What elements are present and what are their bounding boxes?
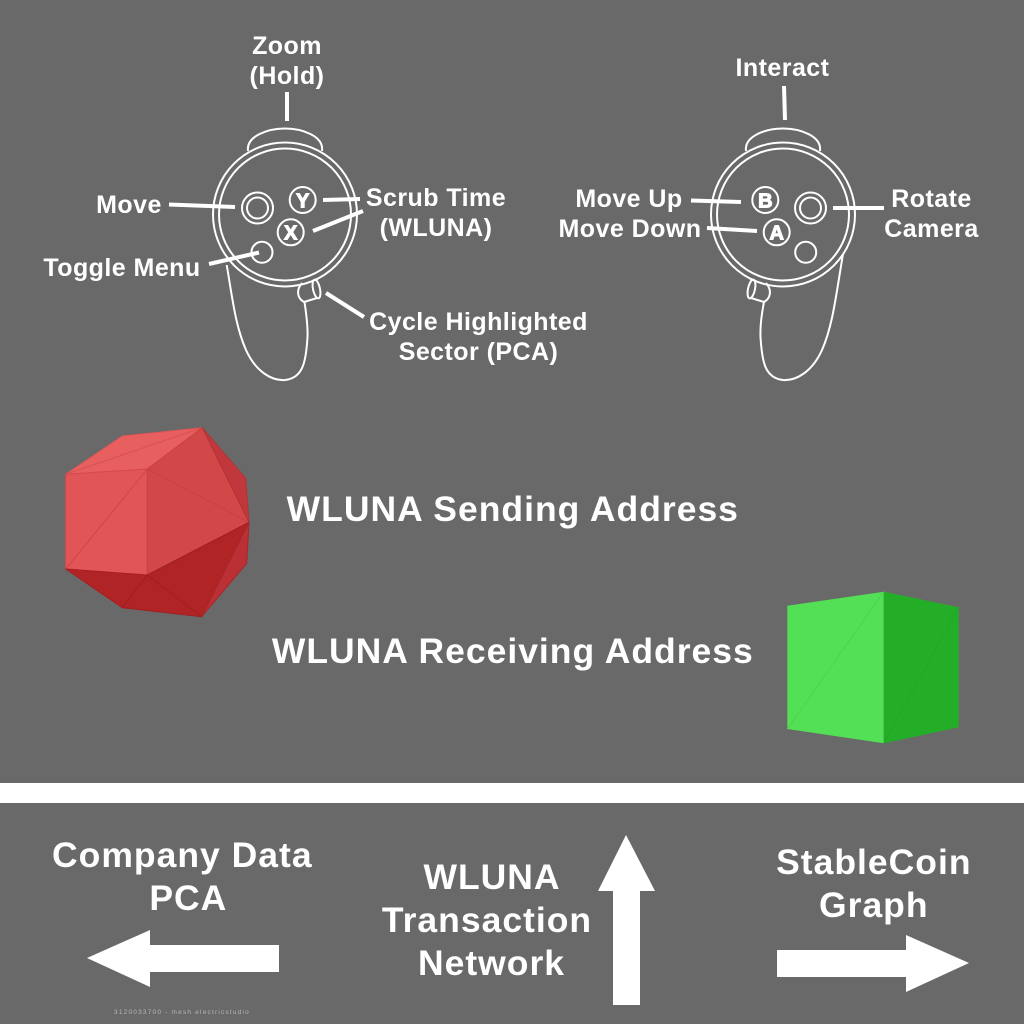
label: zoom hold: Zoom bbox=[252, 32, 322, 60]
pointer lines bbox=[169, 86, 884, 317]
button labels left bbox=[284, 190, 310, 244]
label: wluna transaction network: Transaction bbox=[382, 900, 592, 940]
label: interact: Interact bbox=[736, 54, 830, 82]
label: company data pca: PCA bbox=[149, 878, 227, 918]
watermark: 3120033700 - mesh electricstudio bbox=[114, 1009, 250, 1016]
left arrow bbox=[87, 930, 279, 987]
right arrow bbox=[777, 935, 969, 992]
up arrow bbox=[598, 835, 655, 1005]
red polyhedron bbox=[66, 428, 249, 617]
green cube bbox=[787, 592, 959, 743]
label: scrub time: (WLUNA) bbox=[380, 214, 492, 242]
label: stablecoin graph: StableCoin bbox=[776, 842, 972, 882]
heading: receiving address: WLUNA Receiving Address bbox=[272, 631, 754, 671]
divider band bbox=[0, 783, 1024, 803]
button labels right bbox=[758, 190, 784, 244]
button labels left: X bbox=[284, 222, 298, 244]
label: scrub time: Scrub Time bbox=[366, 184, 506, 212]
label: company data pca: Company Data bbox=[52, 835, 313, 875]
label: cycle highlighted sector: Cycle Highlighted bbox=[369, 308, 588, 336]
heading: sending address: WLUNA Sending Address bbox=[287, 489, 739, 529]
right controller bbox=[711, 128, 855, 380]
label: wluna transaction network: WLUNA bbox=[423, 857, 561, 897]
label: rotate camera: Rotate bbox=[891, 185, 972, 213]
label: zoom hold: (Hold) bbox=[250, 62, 324, 90]
label: move down: Move Down bbox=[559, 215, 701, 243]
label: rotate camera: Camera bbox=[884, 215, 979, 243]
label: stablecoin graph: Graph bbox=[819, 885, 929, 925]
label: move up: Move Up bbox=[575, 185, 683, 213]
label: wluna transaction network: Network bbox=[418, 943, 565, 983]
label: cycle highlighted sector: Sector (PCA) bbox=[399, 338, 558, 366]
button labels right: A bbox=[769, 222, 784, 244]
left controller bbox=[213, 128, 357, 380]
label: toggle menu: Toggle Menu bbox=[43, 254, 201, 282]
button labels right: B bbox=[758, 190, 773, 212]
button labels left: Y bbox=[296, 190, 310, 212]
label: move: Move bbox=[96, 191, 162, 219]
